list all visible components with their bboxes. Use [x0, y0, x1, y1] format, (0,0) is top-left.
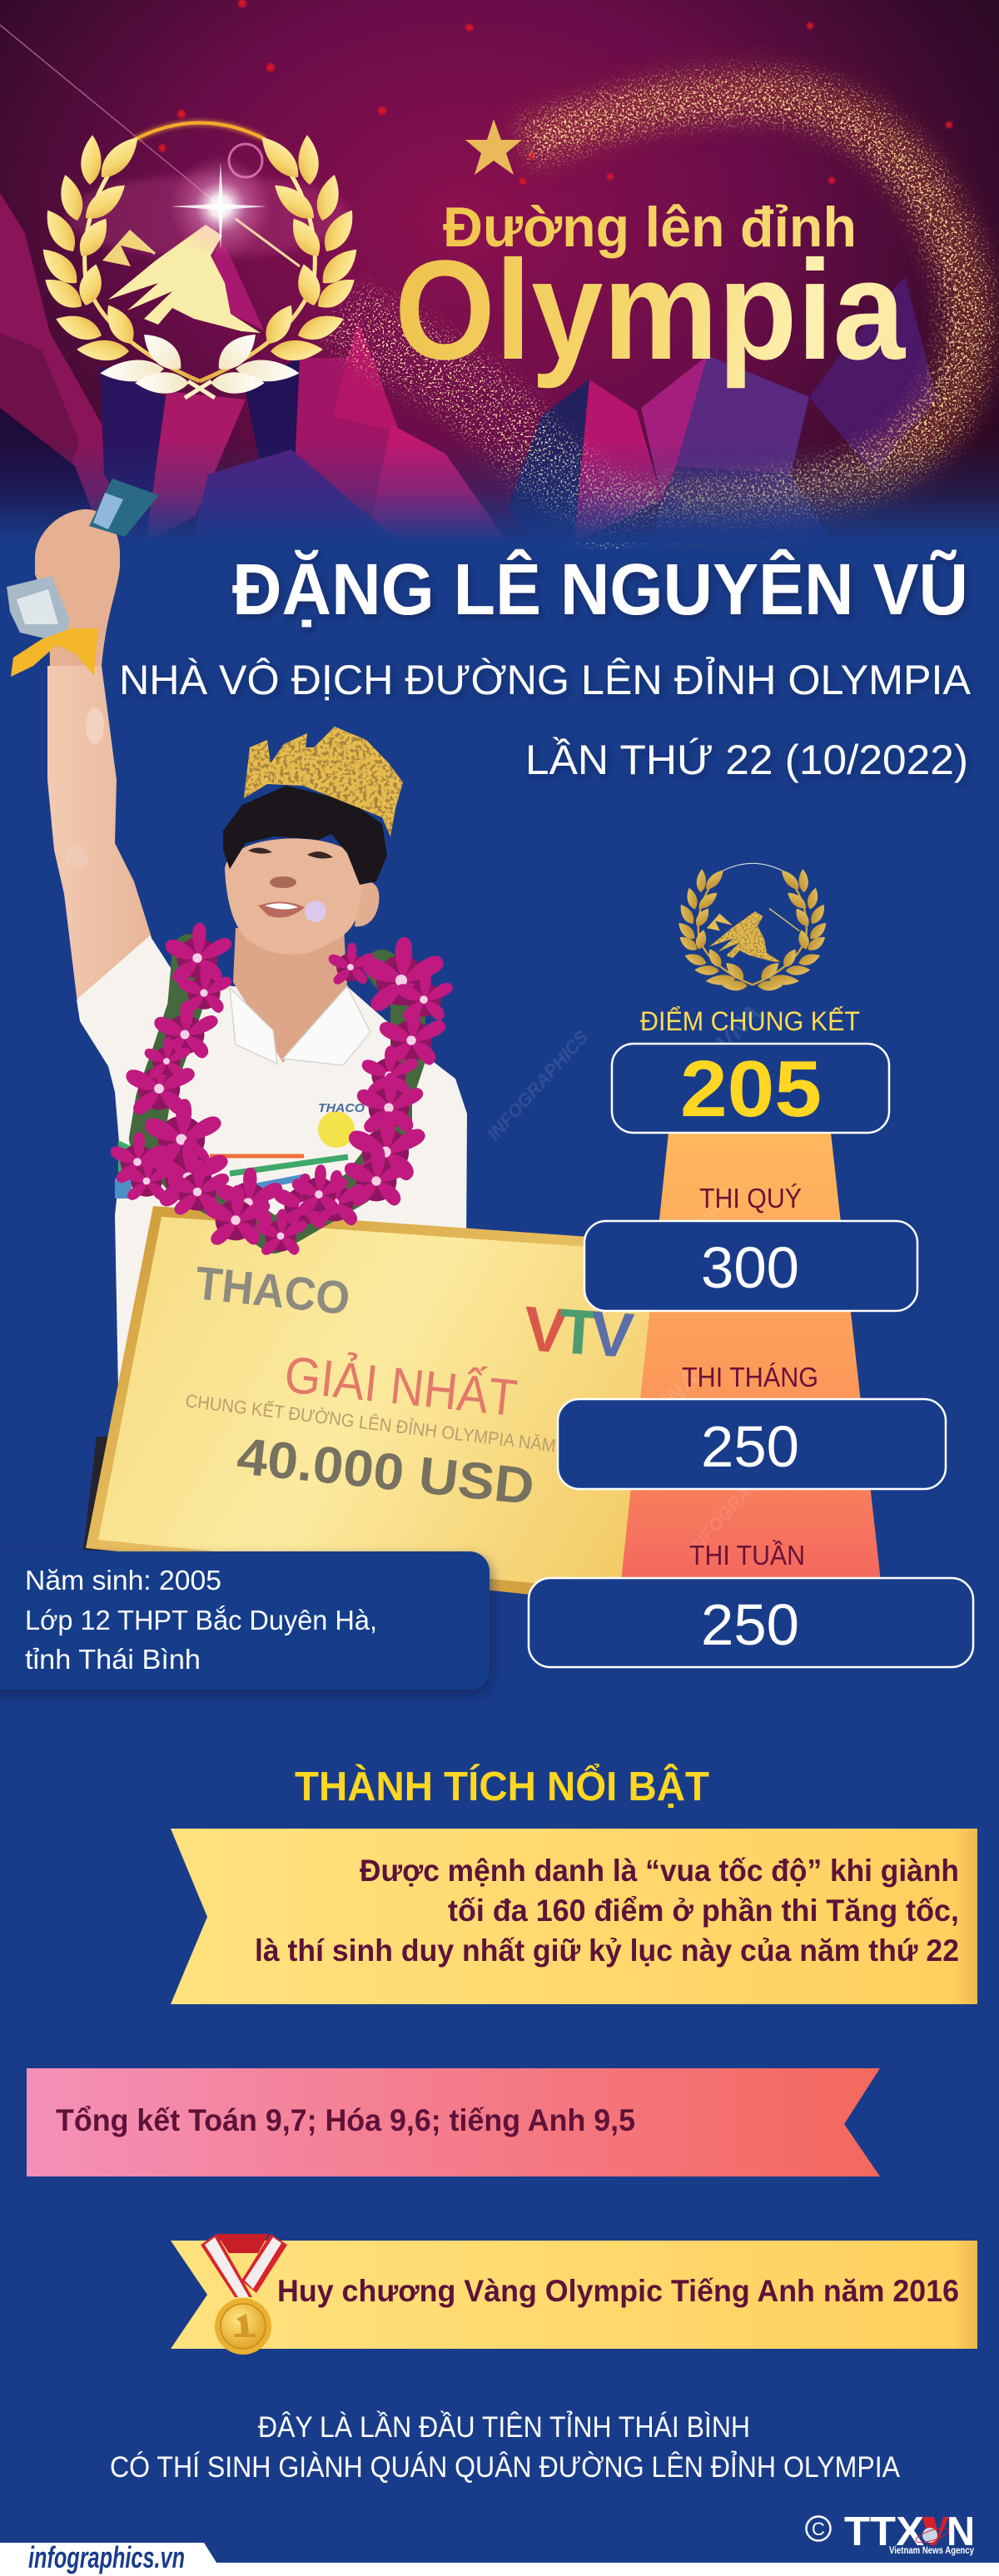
ribbon: speed king: Được mệnh danh là “vua tốc độ” khi giành	[360, 1854, 959, 1888]
facial features	[248, 847, 333, 917]
TTXVN logo: N	[947, 2509, 975, 2554]
VTV logo: T	[556, 1296, 601, 1369]
VTV logo	[521, 1293, 636, 1372]
watermarks: INFOGRAPHICS	[683, 1440, 793, 1558]
badge	[318, 1111, 355, 1148]
TTXVN logo	[806, 2509, 975, 2556]
VTV logo: V	[588, 1298, 636, 1372]
final score: 205	[680, 1045, 822, 1134]
programme title: Đường lên đỉnh	[443, 196, 857, 259]
hair	[223, 786, 387, 885]
TTXVN logo: Vietnam News Agency	[889, 2544, 974, 2556]
icon: gold medal	[201, 2234, 287, 2355]
month round score: 250	[701, 1414, 799, 1479]
achievements heading: THÀNH TÍCH NỔI BẬT	[295, 1764, 709, 1809]
raised arm	[47, 666, 152, 1024]
closing statement	[110, 2410, 901, 2484]
flower garland	[111, 923, 453, 1255]
prize certificate: THACO	[193, 1256, 352, 1324]
dark trousers	[83, 1437, 121, 1551]
programme title: Olympia	[395, 231, 906, 390]
TTXVN logo: C	[812, 2519, 825, 2539]
ribbon: gold medal	[171, 2241, 977, 2349]
watermarks: TTXVN - VNA	[642, 1000, 767, 1134]
trophy packet	[89, 479, 159, 537]
gold star	[465, 119, 522, 175]
personal info card: Năm sinh: 2005	[25, 1565, 221, 1596]
headset dot	[305, 901, 326, 922]
prize certificate: GIẢI NHẤT	[282, 1346, 519, 1427]
ribbon: gold medal: Huy chương Vàng Olympic Tiếng Anh năm 2016	[277, 2274, 959, 2308]
name heading: NHÀ VÔ ĐỊCH ĐƯỜNG LÊN ĐỈNH OLYMPIA	[119, 657, 972, 703]
gold crown	[244, 727, 403, 836]
collar	[230, 986, 370, 1065]
ribbon: school grades: Tổng kết Toán 9,7; Hóa 9,6; tiếng Anh 9,5	[56, 2103, 635, 2137]
watermarks: INFOGRAPHICS	[483, 1026, 593, 1144]
personal info card	[0, 1551, 490, 1690]
olympia laurel logo	[36, 123, 364, 398]
watermarks: INFOGRAPHICS	[637, 1176, 747, 1294]
neck	[233, 928, 347, 1063]
VTV logo: V	[521, 1293, 569, 1367]
week round score: 250	[701, 1592, 799, 1657]
prize certificate: 40.000 USD	[235, 1427, 537, 1516]
glowing arc	[136, 123, 265, 139]
prize certificate: CHUNG KẾT ĐƯỜNG LÊN ĐỈNH OLYMPIA NĂM	[184, 1390, 557, 1457]
personal info card: Lớp 12 THPT Bắc Duyên Hà,	[25, 1605, 377, 1635]
name heading: LẦN THỨ 22 (10/2022)	[525, 737, 968, 783]
footer strip: infographics.vn	[28, 2540, 185, 2574]
week round score	[529, 1540, 973, 1667]
name heading	[119, 548, 972, 783]
TTXVN logo: TTX	[844, 2509, 924, 2554]
winner photo	[7, 479, 683, 1611]
personal info card: tỉnh Thái Bình	[25, 1644, 201, 1675]
crystal trophy	[7, 576, 70, 643]
yellow ribbon	[11, 628, 98, 677]
header banner artwork	[0, 0, 999, 543]
final score: ĐIỂM CHUNG KẾT	[640, 1006, 860, 1036]
week round score: THI TUẦN	[689, 1540, 805, 1571]
ribbon: speed king: là thí sinh duy nhất giữ kỷ lục này của năm thứ 22	[255, 1933, 959, 1968]
month round score: THI THÁNG	[682, 1362, 818, 1392]
small laurel logo	[675, 863, 830, 990]
footer strip	[0, 2540, 999, 2576]
prize certificate	[86, 1206, 683, 1611]
quarter round score: 300	[701, 1235, 799, 1300]
closing statement: CÓ THÍ SINH GIÀNH QUÁN QUÂN ĐƯỜNG LÊN ĐỈNH OLYMPIA	[110, 2450, 901, 2484]
ribbon: school grades	[27, 2068, 880, 2176]
ribbon: speed king: tối đa 160 điểm ở phần thi Tăng tốc,	[448, 1894, 959, 1928]
quarter round score: THI QUÝ	[699, 1183, 802, 1214]
name heading: ĐẶNG LÊ NGUYÊN VŨ	[232, 548, 968, 630]
watermarks	[483, 1000, 793, 1558]
final score	[612, 1006, 889, 1134]
ribbon: speed king	[171, 1829, 977, 2004]
raised hand	[35, 509, 120, 666]
shirt stripes	[115, 1140, 348, 1199]
ear	[355, 881, 379, 926]
polo shirt	[77, 936, 467, 1390]
winner photo: THACO	[318, 1101, 365, 1115]
quarter round score	[584, 1183, 917, 1311]
watermarks: TTXVN - VNA	[579, 1365, 704, 1500]
month round score	[558, 1362, 946, 1489]
score pyramid	[621, 1133, 881, 1581]
closing statement: ĐÂY LÀ LẦN ĐẦU TIÊN TỈNH THÁI BÌNH	[258, 2410, 750, 2444]
face	[225, 838, 361, 955]
